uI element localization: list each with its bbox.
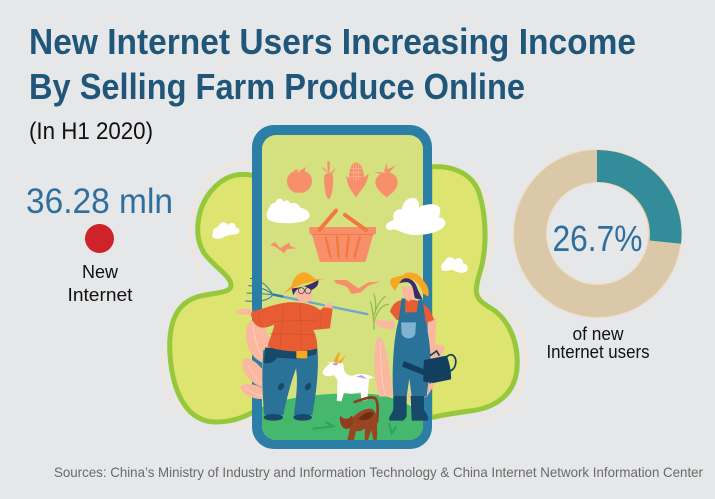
plant sprig — [371, 294, 388, 329]
label: New Internet: Internet — [68, 285, 132, 305]
grass tufts — [313, 422, 396, 433]
donut chart — [530, 150, 682, 301]
icon: small cloud right — [441, 257, 468, 273]
pitchfork — [245, 278, 368, 314]
label: New Internet — [68, 262, 132, 305]
donut value: 26.7% — [552, 218, 642, 259]
label: of new Internet users: of new — [572, 324, 624, 344]
cat — [340, 397, 378, 440]
icon: basket — [309, 211, 376, 262]
icon: cloud center-left — [267, 199, 310, 223]
plant leaves — [240, 321, 445, 399]
goat — [322, 352, 374, 402]
stat: 36.28 mln: 36.28 mln — [26, 181, 173, 221]
label: of new Internet users — [546, 324, 650, 362]
ground — [262, 393, 423, 440]
icon: red dot — [85, 224, 114, 253]
title: New Internet Users Increasing Income — [29, 21, 636, 62]
phone — [252, 125, 432, 449]
label: New Internet: New — [82, 262, 119, 282]
farmer woman — [371, 272, 456, 421]
produce icons and basket — [267, 161, 445, 262]
icon: carrot — [321, 161, 336, 199]
icon: beet — [374, 163, 398, 197]
illustration: farmers and animals — [236, 272, 456, 440]
label: of new Internet users: Internet users — [546, 342, 650, 362]
icon: corn — [346, 162, 369, 197]
farmer man — [236, 272, 333, 421]
title: By Selling Farm Produce Online — [29, 66, 525, 107]
icon: flying bird — [334, 280, 381, 294]
title — [29, 21, 636, 107]
subtitle: (In H1 2020) — [29, 118, 153, 145]
icon: apple — [287, 167, 312, 193]
watering can — [402, 351, 456, 383]
icon: cloud center-right — [386, 198, 445, 235]
illustration: background blobs — [163, 162, 525, 426]
icon: small cloud left — [212, 222, 240, 239]
icon: bird left — [270, 242, 297, 253]
